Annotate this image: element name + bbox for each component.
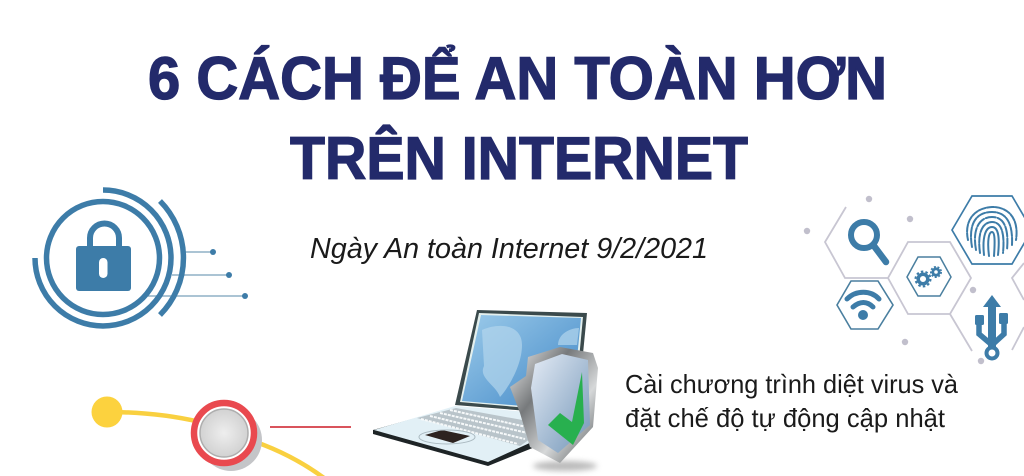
laptop base — [373, 406, 577, 466]
laptop screen — [455, 310, 587, 415]
icon: usb — [975, 295, 1008, 358]
check mark — [548, 372, 584, 445]
icon: fingerprint — [952, 196, 1024, 264]
yellow timeline with red node — [92, 396, 351, 476]
text: step one: Cài chương trình diệt virus và — [625, 369, 959, 399]
subtitle: Ngày An toàn Internet 9/2/2021 — [310, 233, 708, 265]
yellow dot — [92, 396, 122, 428]
icon: magnifier — [851, 222, 886, 262]
title: TRÊN INTERNET — [290, 125, 748, 192]
text: step one — [625, 369, 959, 433]
icon: wifi — [837, 281, 893, 329]
node — [194, 403, 262, 471]
icon: padlock with rings — [35, 190, 248, 326]
shield — [510, 347, 598, 471]
icon cluster: hexagons — [804, 196, 1024, 364]
connector line — [270, 426, 351, 428]
icon: laptop with shield — [373, 310, 598, 471]
text: step one: đặt chế độ tự động cập nhật — [625, 403, 946, 433]
icon: gears — [907, 257, 951, 296]
title — [148, 45, 887, 192]
title: 6 CÁCH ĐỂ AN TOÀN HƠN — [148, 45, 887, 112]
